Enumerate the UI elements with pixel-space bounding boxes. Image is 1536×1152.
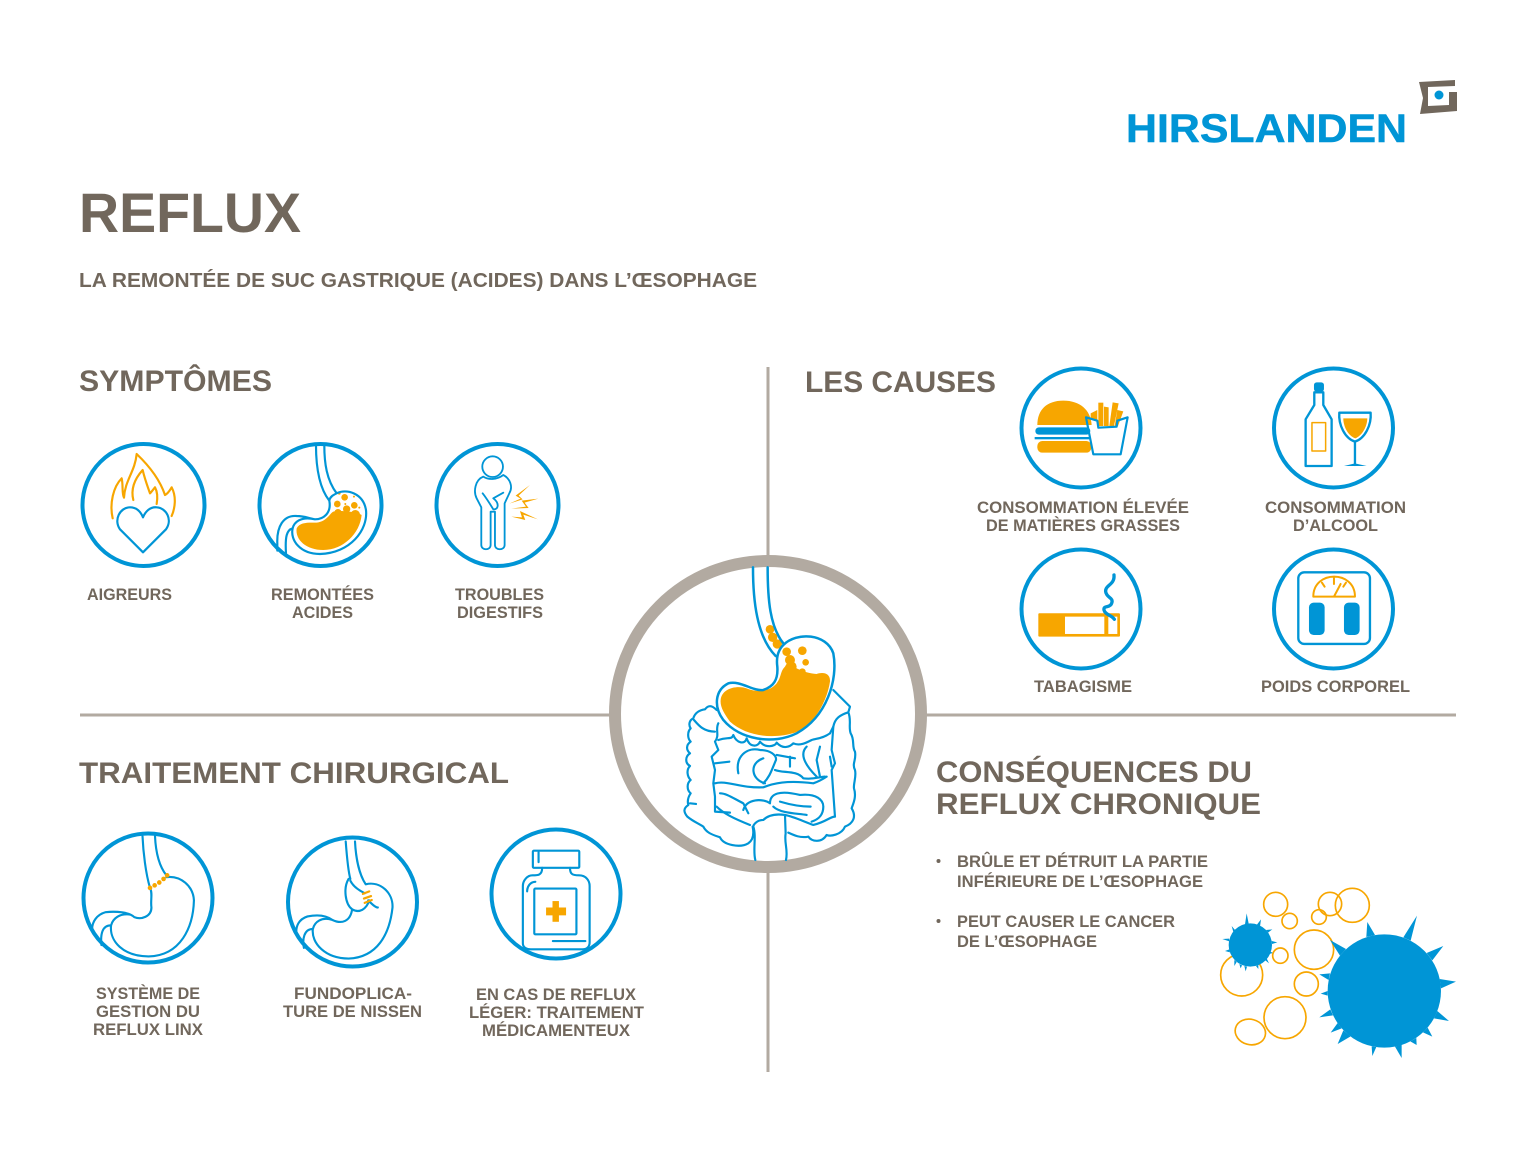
bullet list: DE L’ŒSOPHAGE <box>957 932 1097 951</box>
label: acid reflux: ACIDES <box>292 603 353 622</box>
icon: burger and fries <box>1022 368 1140 488</box>
title: REFLUX <box>79 181 301 244</box>
label: smoking: TABAGISME <box>1034 677 1132 696</box>
bullet list: BRÛLE ET DÉTRUIT LA PARTIE <box>957 852 1208 871</box>
icon: bottle and glass <box>1274 368 1393 488</box>
label: medication: MÉDICAMENTEUX <box>482 1021 631 1040</box>
label: Nissen fundoplication <box>283 984 422 1021</box>
icon: weighing scale <box>1274 550 1393 668</box>
subtitle: LA REMONTÉE DE SUC GASTRIQUE (ACIDES) DANS L’ŒSOPHAGE <box>79 269 757 292</box>
illustration: cancer cells <box>1221 888 1456 1058</box>
label: LINX system: SYSTÈME DE <box>96 984 200 1003</box>
heading: consequences <box>936 755 1261 821</box>
icon: LINX system <box>84 834 212 962</box>
heading: symptoms: SYMPTÔMES <box>79 364 272 398</box>
label: LINX system: REFLUX LINX <box>93 1020 204 1039</box>
panel: surgical treatment <box>79 757 645 1040</box>
label: digestive trouble: TROUBLES <box>455 585 544 604</box>
logo: Hirslanden: HIRSLANDEN <box>1126 107 1407 151</box>
label: digestive trouble <box>455 585 544 622</box>
heading: consequences: REFLUX CHRONIQUE <box>936 788 1261 821</box>
panel: causes <box>805 366 1410 696</box>
label: alcohol <box>1265 498 1406 535</box>
icon: Nissen fundoplication <box>288 838 417 966</box>
heading: causes: LES CAUSES <box>805 366 996 399</box>
panel: consequences <box>936 755 1456 1058</box>
icon: cigarette <box>1022 550 1140 668</box>
label: medication <box>469 985 645 1040</box>
icon: medicine jar <box>492 830 620 958</box>
bullet list: PEUT CAUSER LE CANCER <box>957 912 1175 931</box>
label: fatty food: DE MATIÈRES GRASSES <box>986 516 1180 535</box>
label: acid reflux <box>271 585 374 622</box>
label: Nissen fundoplication: FUNDOPLICA- <box>294 984 412 1003</box>
label: Nissen fundoplication: TURE DE NISSEN <box>283 1002 422 1021</box>
label: fatty food <box>977 498 1189 535</box>
central illustration: stomach and intestines <box>615 561 921 867</box>
logo: Hirslanden <box>1126 80 1457 151</box>
label: alcohol: D’ALCOOL <box>1293 516 1378 535</box>
label: digestive trouble: DIGESTIFS <box>457 603 543 622</box>
heading: surgical treatment: TRAITEMENT CHIRURGICAL <box>79 757 509 790</box>
icon: digestive trouble <box>436 444 558 566</box>
label: acid reflux: REMONTÉES <box>271 585 374 604</box>
label: LINX system <box>93 984 204 1039</box>
label: heartburn: AIGREURS <box>87 585 172 604</box>
bullet list <box>936 852 1208 951</box>
label: medication: LÉGER: TRAITEMENT <box>469 1003 645 1022</box>
label: fatty food: CONSOMMATION ÉLEVÉE <box>977 498 1189 517</box>
bullet list: INFÉRIEURE DE L’ŒSOPHAGE <box>957 872 1203 891</box>
icon: heartburn <box>82 444 204 566</box>
label: alcohol: CONSOMMATION <box>1265 498 1406 517</box>
label: medication: EN CAS DE REFLUX <box>476 985 637 1004</box>
icon: acid reflux stomach <box>260 444 382 566</box>
label: body weight: POIDS CORPOREL <box>1261 677 1410 696</box>
label: LINX system: GESTION DU <box>96 1002 200 1021</box>
heading: consequences: CONSÉQUENCES DU <box>936 755 1252 789</box>
panel: symptoms <box>79 364 558 622</box>
